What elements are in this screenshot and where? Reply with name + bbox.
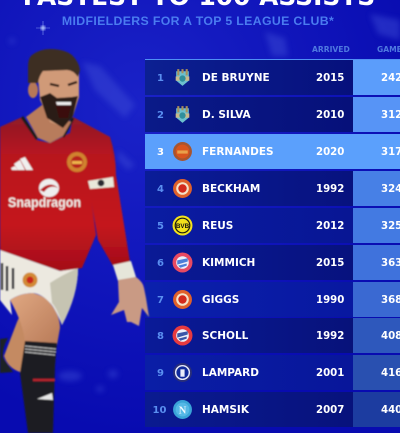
row 8: SCHOLL	[202, 330, 248, 342]
crest: Napoli	[173, 400, 192, 419]
shorts badge	[22, 272, 38, 288]
row 7	[145, 282, 400, 317]
row 2: 2010	[316, 110, 344, 121]
row 1: DE BRUYNE	[202, 72, 270, 84]
crest: Dortmund	[172, 216, 192, 236]
sponsor logo	[39, 179, 59, 197]
row 7: 1990	[316, 295, 344, 306]
row 10: 2007	[316, 405, 344, 416]
row 10	[145, 392, 400, 427]
crest: Man City	[176, 106, 190, 123]
row 10: 10	[153, 405, 166, 416]
shirt body	[0, 117, 114, 271]
crest: Man United	[173, 142, 192, 161]
row 6	[145, 245, 400, 280]
row 5: REUS	[202, 220, 233, 232]
club crest on shirt	[67, 152, 87, 172]
right sleeve	[88, 130, 130, 266]
crest: Napoli: N	[179, 405, 187, 416]
eyes	[50, 82, 77, 86]
crest: Man United	[173, 179, 192, 198]
row 6: 6	[157, 258, 164, 269]
hair	[28, 49, 80, 83]
row 3 highlighted: FERNANDES	[202, 146, 274, 158]
row 6: 2015	[316, 258, 344, 269]
hand	[111, 277, 149, 326]
row 2: D. SILVA	[202, 109, 251, 121]
row 8: 1992	[316, 331, 344, 342]
row 8: 8	[157, 331, 164, 342]
row 9: LAMPARD	[202, 367, 259, 379]
row 3 highlighted: 3	[157, 147, 164, 158]
shorts stripes	[2, 263, 13, 291]
row 2	[145, 97, 400, 132]
front thigh	[10, 293, 60, 345]
row 6: KIMMICH	[202, 257, 255, 269]
column header: arrived: ARRIVED	[312, 45, 350, 54]
wrist band	[113, 261, 136, 281]
shorts	[0, 250, 78, 325]
row 7: 7	[157, 295, 164, 306]
row 9: 9	[157, 368, 164, 379]
row 9: 2001	[316, 368, 344, 379]
table of the ten players	[145, 59, 400, 427]
crest: Bayern	[172, 252, 192, 272]
row 5	[145, 208, 400, 243]
crest: Dortmund: BVB	[176, 223, 190, 230]
row 3 highlighted: 2020	[316, 147, 344, 158]
ear	[28, 82, 38, 98]
row 4: BECKHAM	[202, 183, 260, 195]
front sock	[20, 341, 57, 433]
row 3 highlighted	[145, 134, 400, 169]
sponsor wordmark: Snapdragon	[8, 194, 81, 210]
neck	[26, 105, 71, 143]
row 10: HAMSIK	[202, 404, 249, 416]
row 5: 5	[157, 221, 164, 232]
crest: Man City	[176, 69, 190, 86]
row 4: 4	[157, 184, 164, 195]
row 7: GIGGS	[202, 294, 239, 306]
row 9	[145, 355, 400, 390]
row 8	[145, 318, 400, 353]
beard	[40, 93, 78, 128]
face	[37, 66, 79, 127]
row 2: 2	[157, 110, 164, 121]
row 1: 1	[157, 73, 164, 84]
row 1: 2015	[316, 73, 344, 84]
row 5: 2012	[316, 221, 344, 232]
back leg and sock	[0, 305, 30, 373]
mouth	[55, 102, 72, 118]
crest: Bayern	[172, 326, 192, 346]
crest: Chelsea	[173, 363, 192, 382]
row 4: 1992	[316, 184, 344, 195]
row 4	[145, 171, 400, 206]
subtitle: MIDFIELDERS FOR A TOP 5 LEAGUE CLUB*	[62, 14, 334, 28]
collar	[22, 117, 73, 139]
captain armband	[88, 177, 114, 189]
crest: Man United	[173, 290, 192, 309]
row 1	[145, 60, 400, 95]
adidas logo	[11, 157, 33, 170]
